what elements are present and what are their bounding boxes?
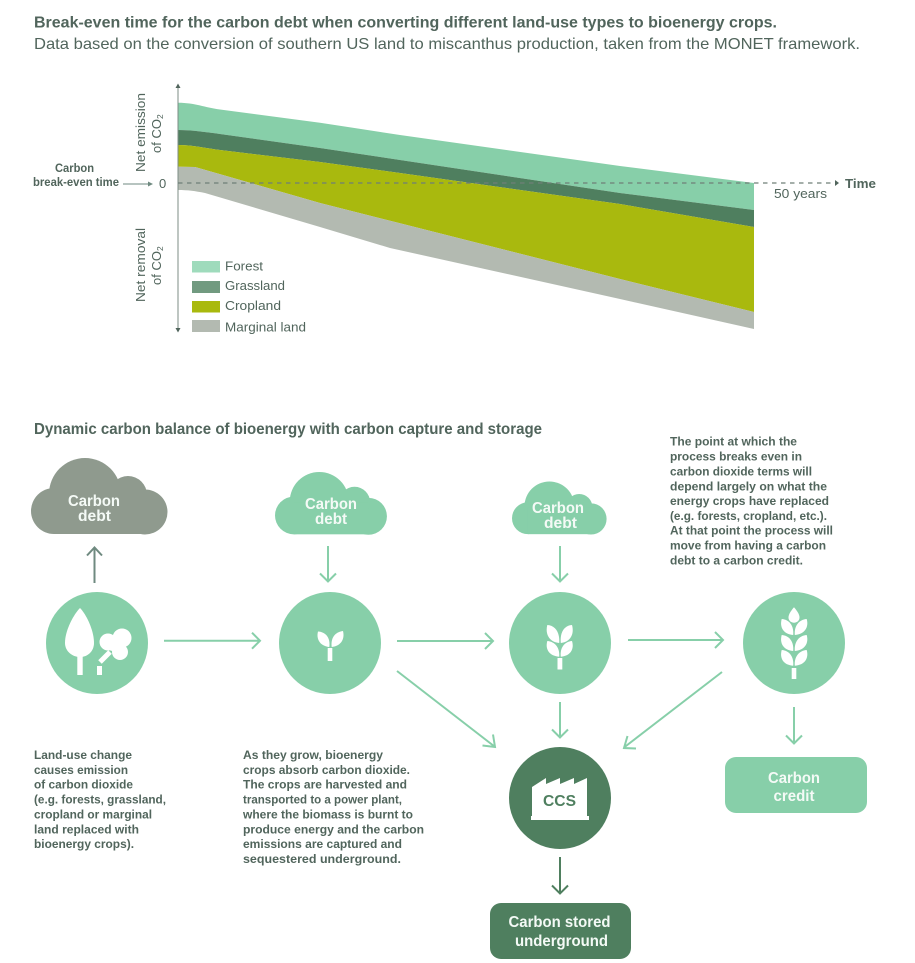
- text block: land-use change: Land-use change: [34, 748, 132, 762]
- icon: ccs factory: CCS: [543, 793, 576, 810]
- box: carbon credit: Carbon: [768, 770, 820, 787]
- legend: Grassland: [225, 278, 285, 293]
- text block: land-use change: causes emission: [34, 763, 128, 777]
- label: carbon break-even time: break-even time: [33, 177, 119, 189]
- text block: break-even explanation: At that point the process will: [670, 524, 833, 538]
- text block: break-even explanation: debt to a carbon credit.: [670, 553, 803, 567]
- text block: crops absorb carbon: produce energy and the carbon: [243, 822, 424, 836]
- arrow: land use to sprout: [164, 633, 260, 649]
- legend: Cropland: [225, 298, 281, 313]
- label: net removal: Net removal: [133, 228, 148, 302]
- text block: crops absorb carbon: [242, 748, 424, 866]
- legend: [192, 258, 306, 334]
- text block: crops absorb carbon: As they grow, bioenergy: [243, 748, 383, 762]
- area: forest: [178, 103, 754, 210]
- icon: ccs factory: [509, 747, 611, 849]
- arrow: mature crop to ccs: [624, 672, 722, 748]
- arrow: break-even pointer: [123, 182, 153, 186]
- icon: land-use trees: [46, 592, 148, 694]
- label: carbon break-even time: Carbon: [55, 163, 94, 175]
- text block: break-even explanation: [670, 435, 833, 567]
- label: 50 years: 50 years: [774, 186, 828, 201]
- text block: break-even explanation: (e.g. forests, cropland, etc.).: [670, 509, 827, 523]
- label: net removal: of CO: [149, 251, 164, 285]
- icon: young crop: [509, 592, 611, 694]
- arrow: carbon debt to young crop: [552, 546, 568, 582]
- vertical axis: [176, 84, 180, 332]
- arrow: sprout to young crop: [397, 633, 493, 649]
- text block: crops absorb carbon: where the biomass is burnt to: [242, 808, 413, 822]
- box: carbon stored underground: [490, 903, 631, 959]
- box: carbon credit: credit: [774, 788, 814, 805]
- area chart: break-even time: [33, 84, 876, 334]
- area: cropland: [178, 145, 754, 312]
- label: time: Time: [845, 176, 876, 191]
- cloud: carbon debt, second stage: debt: [315, 511, 347, 528]
- label: net emission: [133, 93, 165, 172]
- text block: break-even explanation: move from having a carbon: [670, 538, 826, 552]
- label: net emission: of CO: [149, 119, 164, 153]
- text block: crops absorb carbon: crops absorb carbon dioxide.: [243, 763, 410, 777]
- text block: land-use change: bioenergy crops).: [34, 837, 134, 851]
- text block: crops absorb carbon: emissions are captured and: [243, 837, 402, 851]
- label: zero: 0: [159, 176, 166, 191]
- area: marginal land: [178, 167, 754, 329]
- cloud: carbon debt, third stage: Carbon: [532, 500, 584, 517]
- text block: land-use change: (e.g. forests, grassland,: [34, 793, 166, 807]
- title: Data based on the conversion of southern US land to miscanthus production, taken from the MONET framework.: [34, 36, 860, 53]
- area: grassland: [178, 130, 754, 227]
- text block: break-even explanation: process breaks even in: [670, 450, 802, 464]
- time axis: [178, 180, 839, 186]
- cloud: carbon debt, grey: Carbon: [68, 493, 120, 510]
- box: carbon credit: [725, 757, 867, 813]
- text block: land-use change: cropland or marginal: [34, 808, 152, 822]
- icon: mature wheat: [743, 592, 845, 694]
- label: net emission: Net emission: [133, 93, 148, 172]
- arrow: young crop to ccs: [552, 702, 568, 738]
- legend: Marginal land: [225, 320, 306, 334]
- label: carbon break-even time: [33, 163, 119, 189]
- arrow: young crop to mature crop: [628, 632, 723, 648]
- cloud: carbon debt, third stage: debt: [544, 515, 577, 532]
- label: net removal: [133, 228, 165, 302]
- text block: break-even explanation: carbon dioxide terms will: [670, 465, 812, 479]
- title: Break-even time for the carbon debt when converting different land-use types to bioenergy crops.: [34, 14, 777, 32]
- text block: crops absorb carbon: sequestered underground.: [243, 852, 401, 866]
- text block: crops absorb carbon: transported to a power plant,: [243, 793, 402, 807]
- arrow: ccs to storage: [552, 857, 568, 894]
- legend: Forest: [225, 258, 263, 274]
- box: carbon stored underground: Carbon stored: [508, 914, 610, 931]
- arrow: carbon debt to sprout: [320, 546, 336, 582]
- text block: land-use change: of carbon dioxide: [34, 778, 133, 792]
- text block: land-use change: land replaced with: [34, 822, 139, 836]
- heading: dynamic carbon balance: Dynamic carbon balance of bioenergy with carbon capture and storage: [34, 421, 542, 438]
- arrow: sprout to ccs: [397, 671, 495, 747]
- cloud: carbon debt, grey: [31, 458, 168, 534]
- cloud: carbon debt, third stage: [512, 482, 607, 535]
- text block: crops absorb carbon: The crops are harvested and: [243, 778, 407, 792]
- text block: break-even explanation: depend largely on what the: [670, 479, 827, 493]
- box: carbon stored underground: underground: [515, 933, 608, 950]
- cloud: carbon debt, second stage: [275, 472, 387, 535]
- title: [34, 14, 860, 53]
- text block: land-use change: [34, 748, 166, 851]
- text block: break-even explanation: energy crops have replaced: [670, 494, 829, 508]
- text block: break-even explanation: The point at which the: [670, 435, 797, 449]
- arrow: mature crop to carbon credit: [786, 707, 802, 744]
- label: net emission: 2: [155, 114, 165, 119]
- cloud: carbon debt, grey: debt: [78, 508, 111, 525]
- cloud: carbon debt, second stage: Carbon: [305, 496, 357, 513]
- icon: sprout: [279, 592, 381, 694]
- arrow: land use to carbon debt: [87, 548, 102, 583]
- label: net removal: 2: [155, 246, 165, 251]
